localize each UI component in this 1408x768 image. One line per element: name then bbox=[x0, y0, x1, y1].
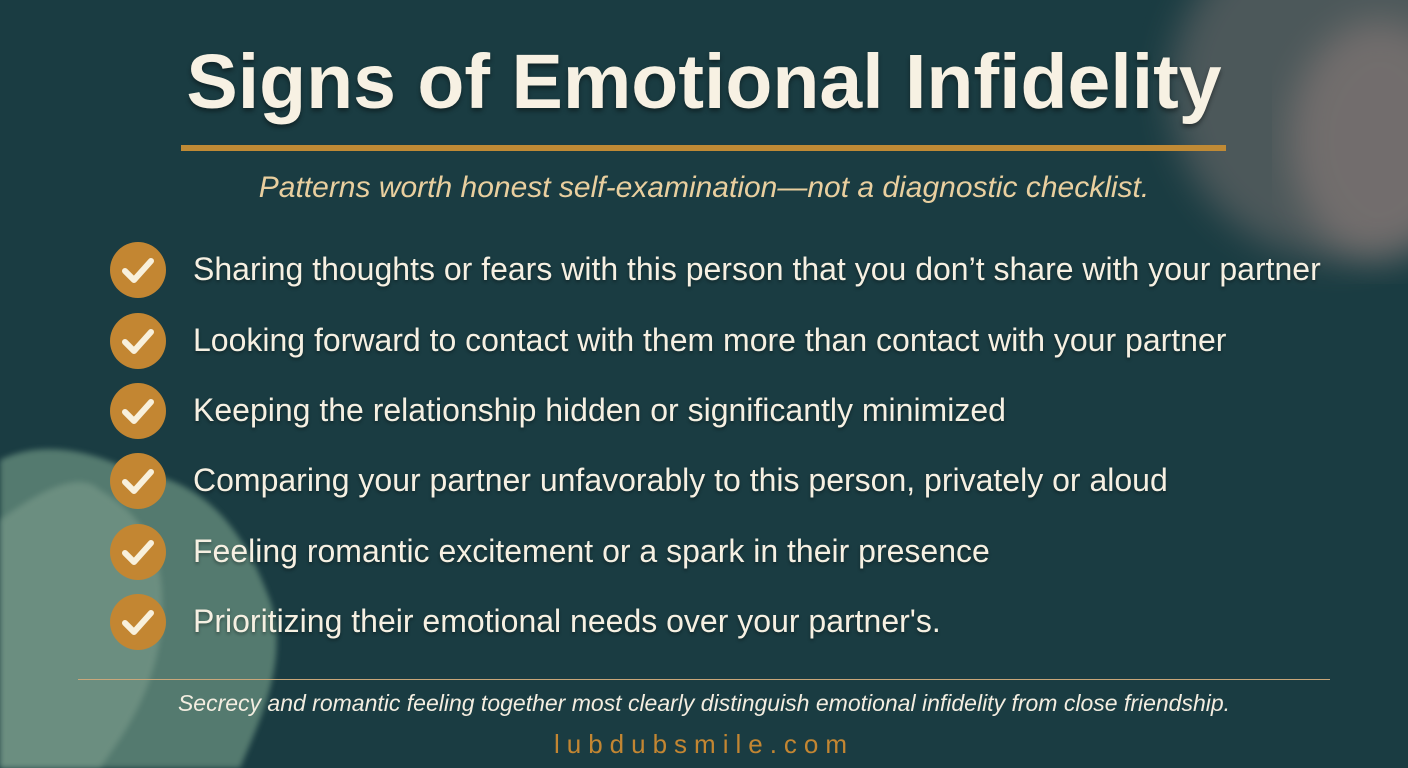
subtitle: Patterns worth honest self-examination—not a diagnostic checklist. bbox=[259, 171, 1149, 204]
item 3 bbox=[110, 383, 1006, 439]
item 6 bbox=[110, 594, 941, 650]
item 3: Keeping the relationship hidden or significantly minimized bbox=[193, 392, 1006, 428]
footer note: Secrecy and romantic feeling together most clearly distinguish emotional infidelity from close friendship. bbox=[178, 690, 1230, 716]
item 1: Sharing thoughts or fears with this person that you don’t share with your partner bbox=[193, 251, 1321, 287]
item 4: Comparing your partner unfavorably to this person, privately or aloud bbox=[193, 462, 1168, 498]
website url: lubdubsmile.com bbox=[554, 729, 854, 759]
item 5: Feeling romantic excitement or a spark in their presence bbox=[193, 533, 990, 569]
list of signs bbox=[110, 242, 1321, 650]
item 5 bbox=[110, 524, 990, 580]
item 2: Looking forward to contact with them more than contact with your partner bbox=[193, 322, 1226, 358]
item 1 bbox=[110, 242, 1321, 298]
title: Signs of Emotional Infidelity bbox=[186, 39, 1222, 125]
title underline bbox=[181, 145, 1226, 151]
item 6: Prioritizing their emotional needs over your partner's. bbox=[193, 603, 941, 639]
item 4 bbox=[110, 453, 1168, 509]
item 2 bbox=[110, 313, 1226, 369]
